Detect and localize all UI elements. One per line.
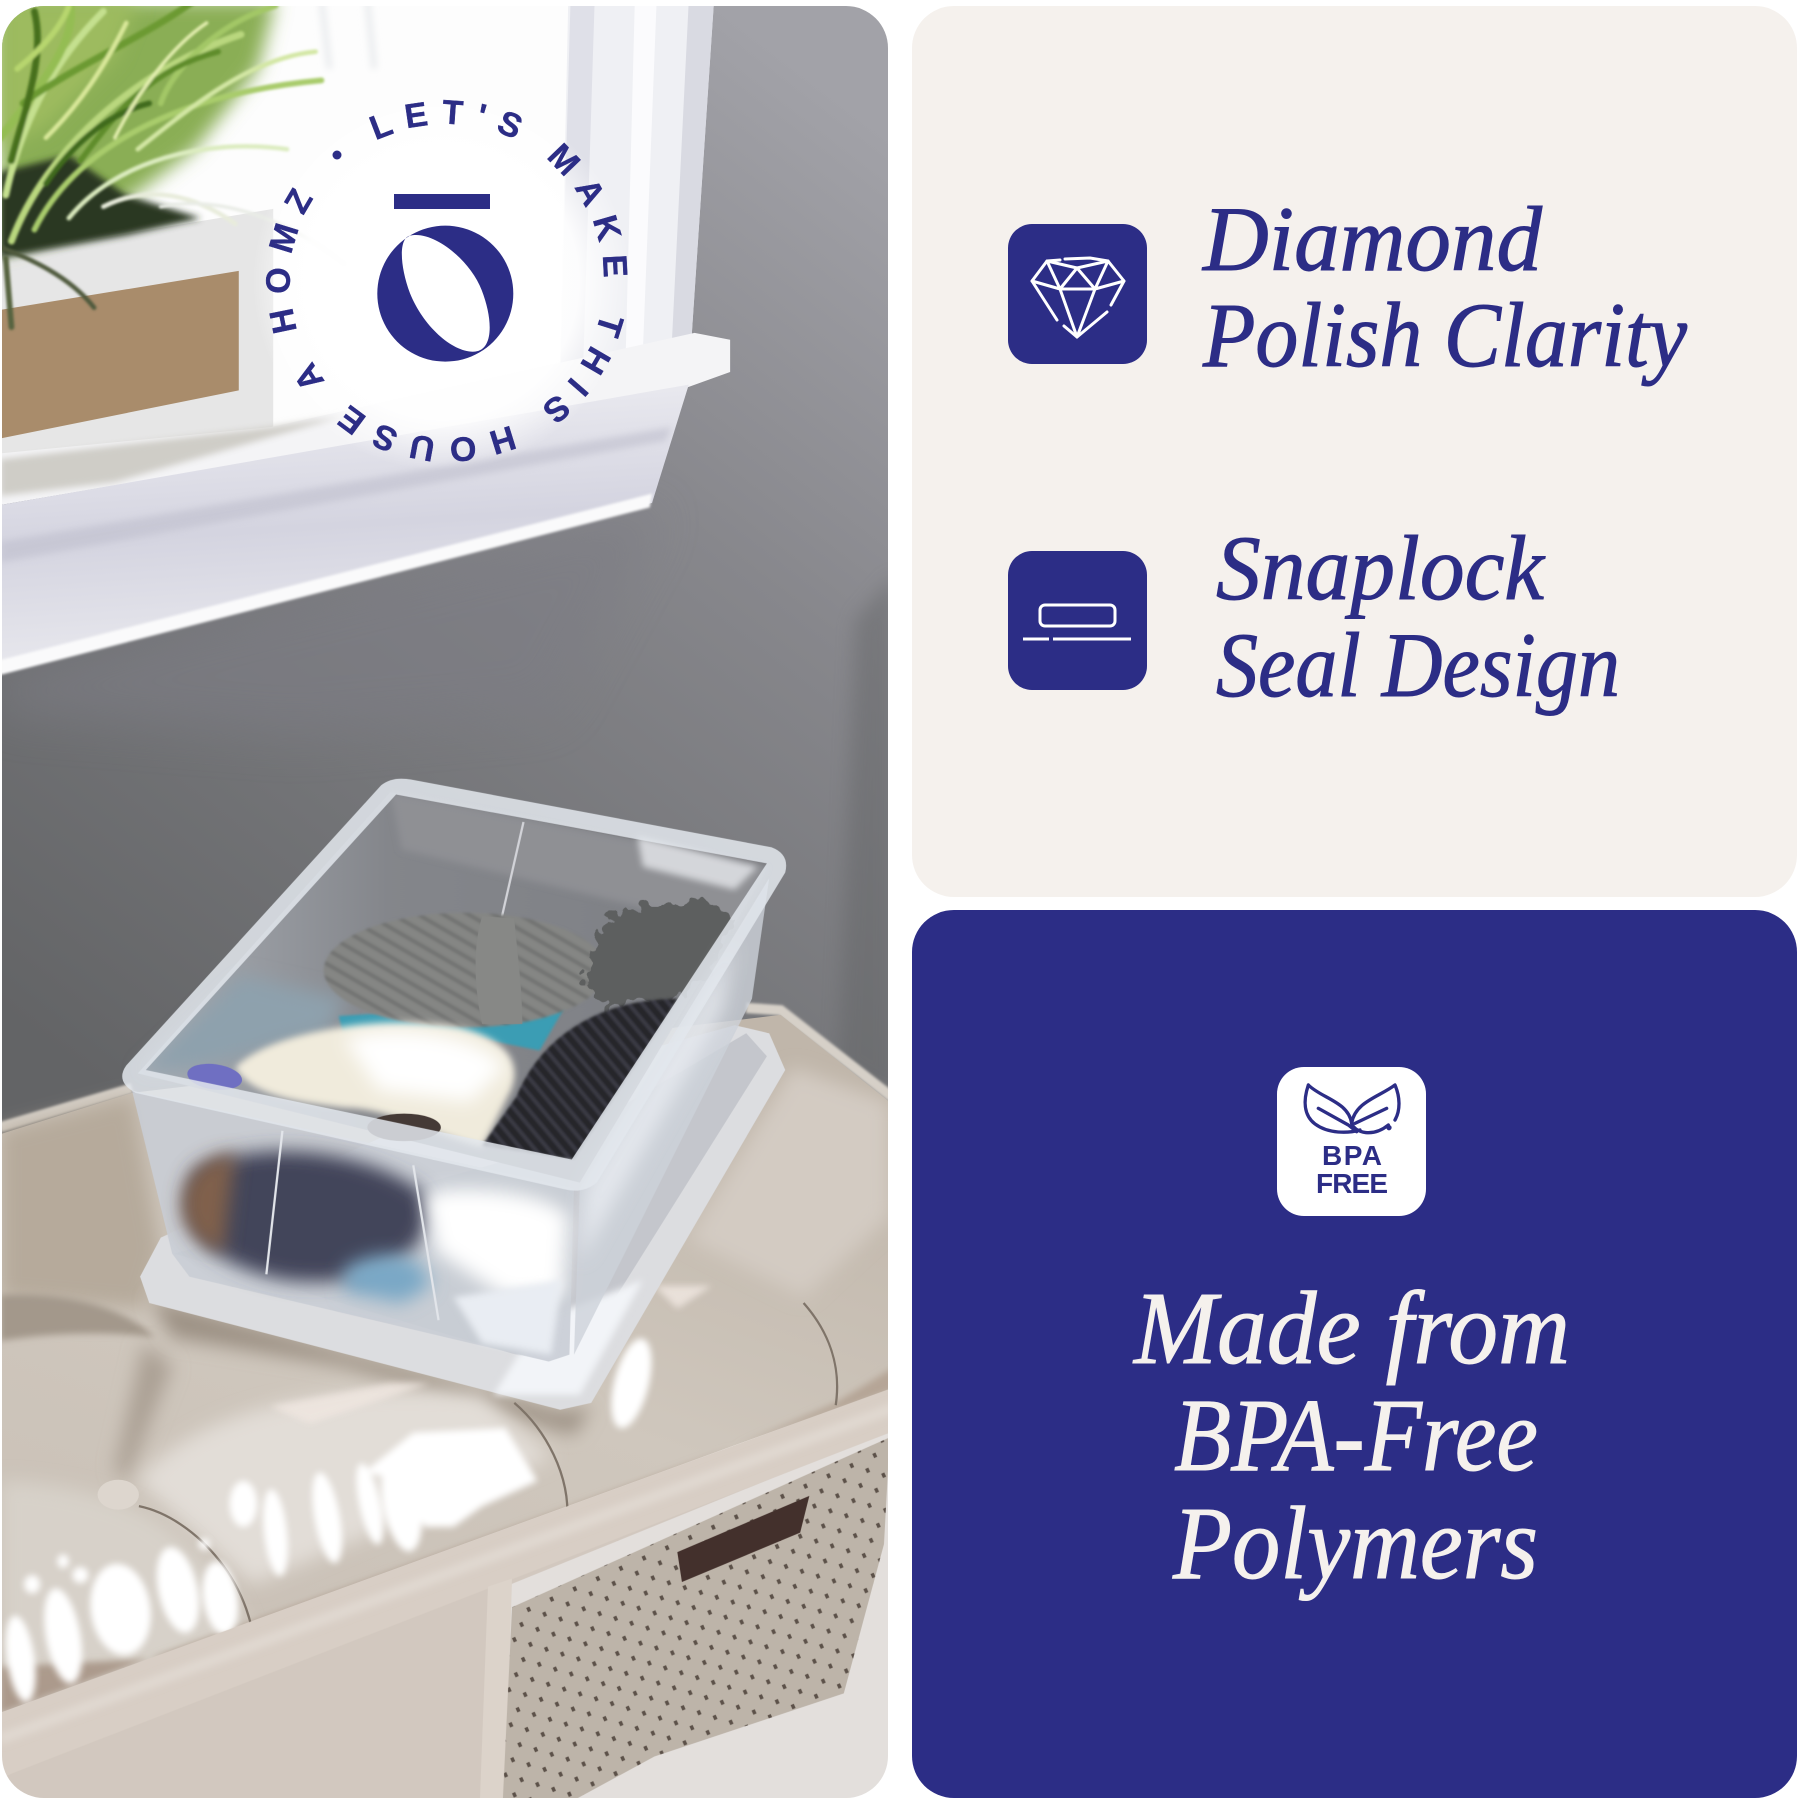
cushion tuft shadows [0,1068,890,1699]
cushion front face [0,1366,895,1713]
logo: circular badge [266,100,628,462]
window casing [560,0,714,370]
grass foliage [0,0,344,327]
black knit yarn [482,999,677,1159]
box ribs [266,1131,439,1320]
heading: Snaplock Seal Design [1216,517,1620,716]
box inner rib [499,822,523,928]
box interior reflection [637,836,758,890]
panel: features [912,6,1797,897]
heading: Made from BPA-Free Polymers: BPA-Free [1174,1378,1538,1493]
wall background [0,0,895,1148]
cream yarn [235,1023,514,1148]
storage box lid [140,1025,785,1410]
bench cream trim [0,1387,895,1779]
teal yarn [339,1001,568,1050]
fluffy grey yarn [585,901,737,1004]
basket handle [677,1496,809,1582]
heading: Made from BPA-Free Polymers: Made from [1132,1271,1570,1386]
sill moulding [0,385,689,673]
cabinet post [480,1578,512,1800]
cabinet base [0,1419,895,1800]
badge dot [332,150,342,160]
icon: BPA free badge [1277,1067,1426,1216]
icon: diamond [1008,224,1147,364]
heading: Diamond Polish Clarity: Polish Clarity [1202,284,1687,386]
yarn contents [186,901,737,1159]
window sill top [0,333,730,505]
badge ring text: LET'S MAKE THIS HOUSE A HOMZ [266,100,628,462]
box right wall [574,878,769,1355]
logo letter o [377,226,513,362]
wall shadow band [843,586,888,1084]
logo macron bar [394,194,490,209]
tuft button [98,1480,139,1510]
planter frame [0,209,273,465]
bench back trim [0,1008,895,1127]
box rim [122,779,786,1191]
heading: Diamond Polish Clarity: Diamond [1201,188,1543,290]
panel: lifestyle photo of storage box [0,0,895,1800]
grey yarn skein [324,913,606,1027]
panel: BPA free [912,910,1797,1798]
woven basket [503,1437,890,1800]
white shelf at right [505,1428,895,1800]
white glow behind logo [253,92,631,471]
brown yarn peek [367,1114,441,1141]
box interior [138,792,769,1182]
cushion seams [139,1303,837,1665]
heading: Snaplock Seal Design: Seal Design [1216,614,1620,716]
heading: Diamond Polish Clarity [1201,188,1687,386]
icon: BPA free badge: FREE [1316,1168,1388,1199]
soft sill shadow on wall [72,678,156,696]
window glass [2,6,568,426]
icon: BPA free badge: BPA [1322,1140,1382,1171]
icon: snaplock seal [1008,551,1147,690]
sunlight highlights [1,1335,659,1704]
bench cushion [0,1015,895,1713]
contents seen through front wall [183,1151,568,1355]
box front wall [132,1091,574,1362]
heading: Made from BPA-Free Polymers: Polymers [1172,1486,1538,1601]
planter wood panel [0,271,239,439]
heading: Made from BPA-Free Polymers [1132,1271,1570,1601]
heading: Snaplock Seal Design: Snaplock [1216,517,1546,619]
window mullions [321,0,374,69]
purple handle tab [186,1060,244,1093]
